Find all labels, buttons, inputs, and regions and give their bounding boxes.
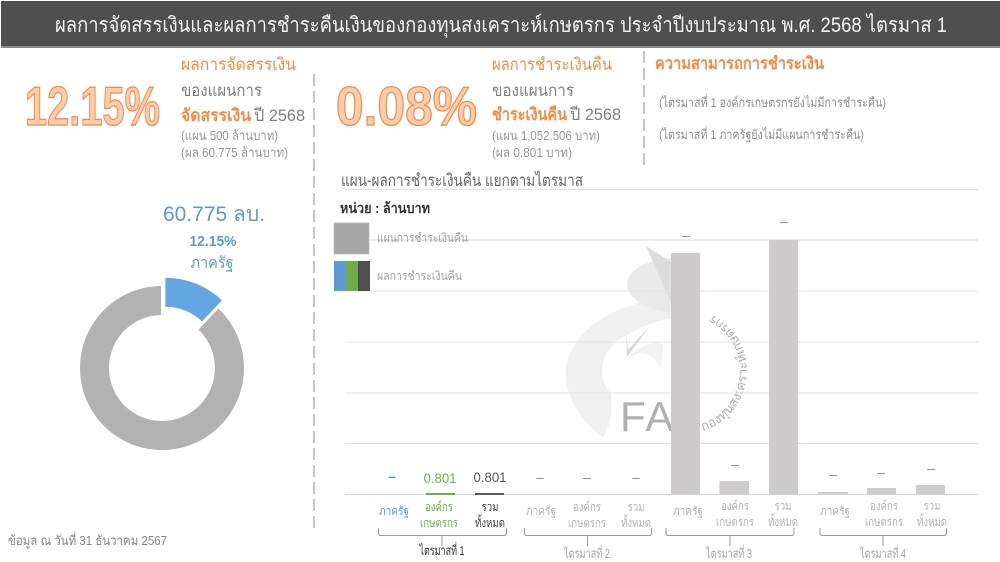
value labels: – xyxy=(927,460,935,476)
watermark logo: กองทุนสงเคราะห์เกษตรกร xyxy=(702,316,747,431)
category labels: องค์กร xyxy=(870,499,898,513)
category labels: เกษตรกร xyxy=(865,515,903,529)
category labels: ทั้งหมด xyxy=(917,513,947,529)
category labels: องค์กร xyxy=(425,500,453,514)
bar chart xyxy=(345,190,978,561)
capacity note 2: (ไตรมาสที่ 1 ภาครัฐยังไม่มีแผนการชำระคืน) xyxy=(659,126,864,143)
Q4 bars xyxy=(818,485,945,494)
value labels: – xyxy=(780,213,788,229)
repayment description: ปี 2568 xyxy=(569,105,621,124)
category labels: ทั้งหมด xyxy=(475,514,505,530)
watermark ring text xyxy=(700,310,747,431)
repayment heading: ผลการชำระเงินคืน xyxy=(492,55,612,74)
repayment description: ชำระเงินคืน xyxy=(492,104,567,124)
repayment description: ของแผนการ xyxy=(492,81,574,100)
value labels: – xyxy=(583,469,591,485)
category labels: ภาครัฐ xyxy=(526,504,556,518)
header bar xyxy=(1,1,1000,48)
category labels: ทั้งหมด xyxy=(768,513,798,529)
value labels: – xyxy=(536,469,544,485)
quarter labels: ไตรมาสที่ 4 xyxy=(859,545,906,561)
repayment description: (แผน 1,052.506 บาท) xyxy=(492,128,600,143)
source note: ข้อมูล ณ วันที่ 31 ธันวาคม 2567 xyxy=(8,532,167,549)
category labels: องค์กร xyxy=(573,500,601,514)
donut chart xyxy=(80,203,265,450)
panel: repayment capacity xyxy=(655,54,886,143)
quarter labels: ไตรมาสที่ 3 xyxy=(705,545,752,561)
legend: result: ผลการชำระเงินคืน xyxy=(377,269,462,283)
legend xyxy=(334,223,468,291)
dashed divider lines xyxy=(314,51,644,533)
quarter labels: ไตรมาสที่ 1 xyxy=(419,542,464,558)
value labels: – xyxy=(388,468,396,484)
allocation heading: ผลการจัดสรรเงิน xyxy=(181,55,296,74)
value labels: 0.801 xyxy=(424,470,457,486)
category labels: รวม xyxy=(628,500,644,514)
category labels: รวม xyxy=(774,499,792,513)
allocation description: (ผล 60.775 ล้านบาท) xyxy=(181,145,288,160)
value labels xyxy=(388,213,935,486)
category labels: รวม xyxy=(924,499,940,513)
panel: allocation result xyxy=(25,55,305,160)
category labels: เกษตรกร xyxy=(420,516,458,530)
watermark logo xyxy=(566,246,747,440)
quarter labels: ไตรมาสที่ 2 xyxy=(563,545,610,561)
category labels: ทั้งหมด xyxy=(621,514,651,530)
Q3 bars xyxy=(671,240,798,494)
value labels: – xyxy=(682,227,690,243)
capacity note 1: (ไตรมาสที่ 1 องค์กรเกษตรกรยังไม่มีการชำระคืน) xyxy=(659,94,886,110)
big percent 12.15: 12.15% xyxy=(25,75,160,137)
repayment description xyxy=(492,81,621,160)
watermark letters: FA xyxy=(620,393,675,440)
allocation description: (แผน 500 ล้านบาท) xyxy=(181,128,278,143)
category labels xyxy=(379,499,947,530)
value labels: – xyxy=(731,456,739,472)
allocation description: ของแผนการ xyxy=(181,81,262,100)
quarter brackets xyxy=(378,528,946,546)
allocation description xyxy=(181,81,305,160)
category labels: องค์กร xyxy=(721,499,749,513)
allocation description: ปี 2568 xyxy=(253,106,305,125)
category labels: รวม xyxy=(482,500,498,514)
unit label: หน่วย : ล้านบาท xyxy=(340,200,430,216)
category labels: ภาครัฐ xyxy=(673,504,703,518)
panel: repayment result xyxy=(336,55,621,160)
donut value label: 60.775 ลบ. xyxy=(163,203,265,226)
donut sector label: ภาครัฐ xyxy=(190,255,234,272)
donut remainder segment xyxy=(80,286,244,450)
quarter labels xyxy=(419,542,906,561)
category labels: ภาครัฐ xyxy=(820,504,850,518)
category labels: เกษตรกร xyxy=(716,515,754,529)
donut percent label: 12.15% xyxy=(190,233,236,250)
Q1 bars xyxy=(426,493,504,495)
big percent 0.08: 0.08% xyxy=(336,75,477,137)
donut allocated segment xyxy=(165,278,222,321)
repayment description: (ผล 0.801 บาท) xyxy=(492,145,572,160)
chart heading: แผน-ผลการชำระเงินคืน แยกตามไตรมาส xyxy=(341,170,583,190)
capacity heading: ความสามารถการชำระเงิน xyxy=(655,54,824,73)
legend: plan: แผนการชำระเงินคืน xyxy=(377,231,468,245)
category labels: ภาครัฐ xyxy=(379,504,409,518)
value labels: 0.801 xyxy=(474,469,507,485)
allocation description: จัดสรรเงิน xyxy=(181,106,251,125)
value labels: – xyxy=(877,464,885,480)
value labels: – xyxy=(829,466,837,482)
value labels: – xyxy=(632,469,640,485)
category labels: เกษตรกร xyxy=(568,516,606,530)
